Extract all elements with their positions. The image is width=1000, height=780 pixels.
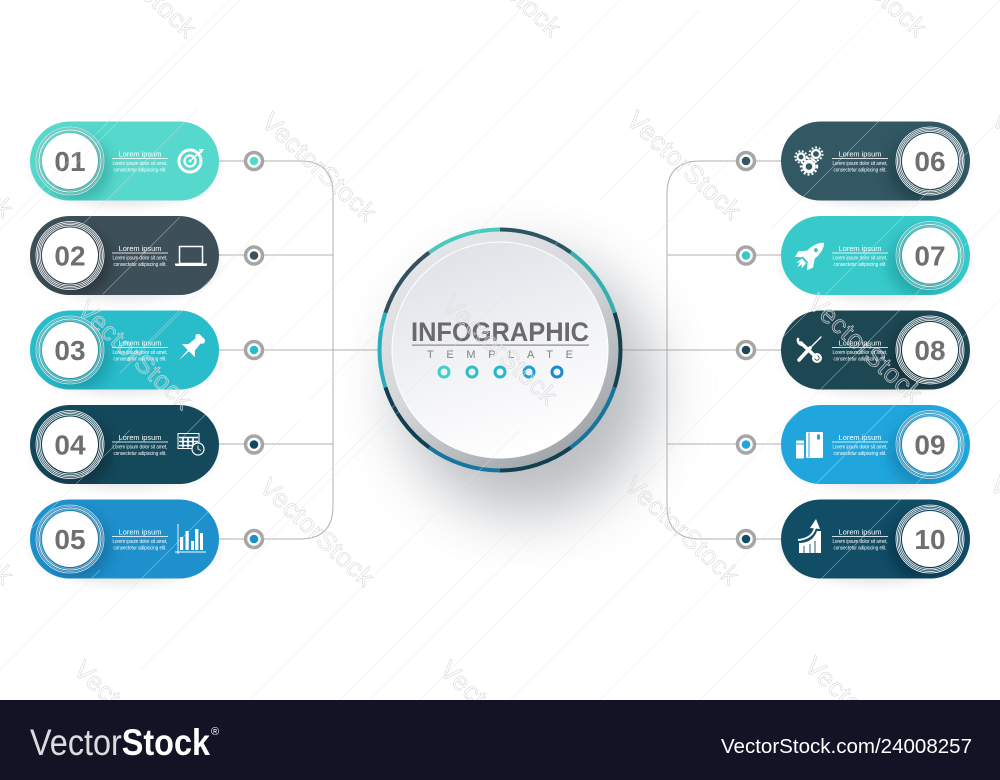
text block: Lorem ipsum [839, 244, 881, 253]
panel: item 02 [30, 216, 262, 300]
icon: target [179, 149, 204, 172]
text block: Lorem ipsum [119, 433, 161, 442]
panel: item 07 [738, 216, 970, 300]
text block: Lorem ipsum [119, 528, 161, 536]
text block: Lorem ipsum [839, 433, 881, 442]
watermarks: VectorStock [256, 106, 383, 228]
footer bar [0, 700, 1000, 780]
node [246, 247, 262, 264]
text block [832, 244, 888, 268]
watermarks: VectorStock [68, 654, 195, 776]
node [738, 530, 754, 548]
panel: item 01 [30, 122, 262, 205]
node [738, 436, 754, 453]
watermarks: VectorStock [799, 650, 926, 772]
watermarks: VectorStock [72, 294, 199, 416]
text block: Lorem ipsum [839, 338, 881, 348]
node [246, 530, 262, 548]
text block: consectetur adipiscing elit. [834, 451, 887, 457]
text block: Lorem ipsum [839, 528, 881, 536]
center circle shadow [398, 258, 654, 514]
watermarks: VectorStock [437, 289, 564, 411]
title underline [412, 344, 589, 346]
number badge: 09 [914, 430, 946, 460]
text block [112, 150, 168, 173]
footer image id: VectorStock.com/24008257 [721, 736, 972, 758]
icon: growth chart [798, 519, 821, 553]
number badge [36, 222, 104, 290]
text block: consectetur adipiscing elit. [114, 356, 167, 362]
center dots [439, 367, 562, 377]
text block: consectetur adipiscing elit. [834, 167, 887, 173]
panel: item 06 [738, 122, 970, 205]
watermarks: VectorStock [619, 469, 746, 591]
panel: item 05 [30, 500, 262, 583]
text block: Lorem ipsum dolor sit amet, [832, 256, 888, 262]
icon: gears [795, 148, 822, 174]
number badge [36, 505, 104, 573]
center circle [380, 230, 654, 514]
number badge: 06 [914, 146, 946, 177]
text block: Lorem ipsum dolor sit amet, [832, 350, 888, 356]
watermarks: VectorStock [621, 104, 748, 226]
panel: item 10 [738, 500, 970, 583]
number badge: 03 [54, 335, 86, 366]
icon: bar chart [175, 524, 206, 554]
node [246, 152, 262, 170]
text block: consectetur adipiscing elit. [834, 545, 887, 551]
center face [392, 242, 608, 458]
footer registered mark: ® [211, 726, 219, 738]
watermarks: VectorStock [254, 471, 381, 593]
text block: Lorem ipsum dolor sit amet, [832, 444, 888, 450]
icon: rocket [790, 235, 831, 275]
watermarks: VectorStock [434, 654, 561, 776]
footer logo: VectorStock [30, 722, 210, 763]
panel: item 03 [30, 310, 262, 394]
icon: calendar with clock [178, 434, 204, 455]
number badge: 07 [914, 240, 946, 272]
number badge: 08 [914, 335, 946, 366]
text block: consectetur adipiscing elit. [114, 262, 167, 268]
text block: Lorem ipsum [839, 150, 881, 158]
text block [832, 528, 888, 551]
text block [112, 338, 168, 362]
node [738, 247, 754, 264]
number badge [896, 316, 964, 384]
subtitle: TEMPLATE [427, 349, 573, 361]
panel: item 04 [30, 405, 262, 488]
text block [832, 150, 888, 173]
segmented ring [380, 230, 620, 470]
icon: laptop [175, 246, 207, 266]
node [738, 152, 754, 170]
number badge [896, 127, 964, 195]
text block: consectetur adipiscing elit. [834, 356, 887, 362]
text block: Lorem ipsum [119, 244, 161, 253]
text block: consectetur adipiscing elit. [114, 451, 167, 457]
text block: Lorem ipsum dolor sit amet, [112, 350, 168, 356]
node [738, 342, 754, 358]
text block: consectetur adipiscing elit. [114, 167, 167, 173]
text block: consectetur adipiscing elit. [114, 545, 167, 551]
number badge: 10 [914, 524, 946, 555]
number badge [36, 127, 104, 195]
text block: Lorem ipsum [119, 150, 161, 158]
text block [112, 433, 168, 457]
text block: Lorem ipsum dolor sit amet, [112, 444, 168, 450]
text block: Lorem ipsum dolor sit amet, [112, 161, 168, 167]
text block [112, 528, 168, 551]
text block [832, 338, 888, 362]
text block: Lorem ipsum dolor sit amet, [112, 539, 168, 545]
number badge: 01 [54, 146, 86, 177]
title: INFOGRAPHIC [411, 317, 589, 347]
text block [112, 244, 168, 268]
icon: wrench and screwdriver [798, 337, 821, 362]
number badge [896, 410, 964, 478]
center base disc [381, 231, 619, 469]
watermarks: VectorStock [802, 287, 929, 409]
text block: Lorem ipsum dolor sit amet, [832, 539, 888, 545]
icon: cards [796, 432, 823, 458]
number badge [896, 222, 964, 290]
text block: Lorem ipsum dolor sit amet, [112, 256, 168, 262]
number badge [896, 505, 964, 573]
panel: item 08 [738, 310, 970, 394]
panel: item 09 [738, 405, 970, 488]
text block: Lorem ipsum [119, 338, 161, 348]
number badge: 02 [54, 240, 86, 272]
number badge: 04 [54, 430, 86, 460]
text block [832, 433, 888, 457]
number badge: 05 [54, 524, 86, 555]
node [246, 436, 262, 453]
number badge [36, 316, 104, 384]
text block: Lorem ipsum dolor sit amet, [832, 161, 888, 167]
number badge [36, 410, 104, 478]
connector lines: left [219, 161, 380, 539]
node [246, 342, 262, 358]
connector lines: right [620, 161, 781, 539]
icon: push pin [172, 330, 209, 367]
text block: consectetur adipiscing elit. [834, 262, 887, 268]
